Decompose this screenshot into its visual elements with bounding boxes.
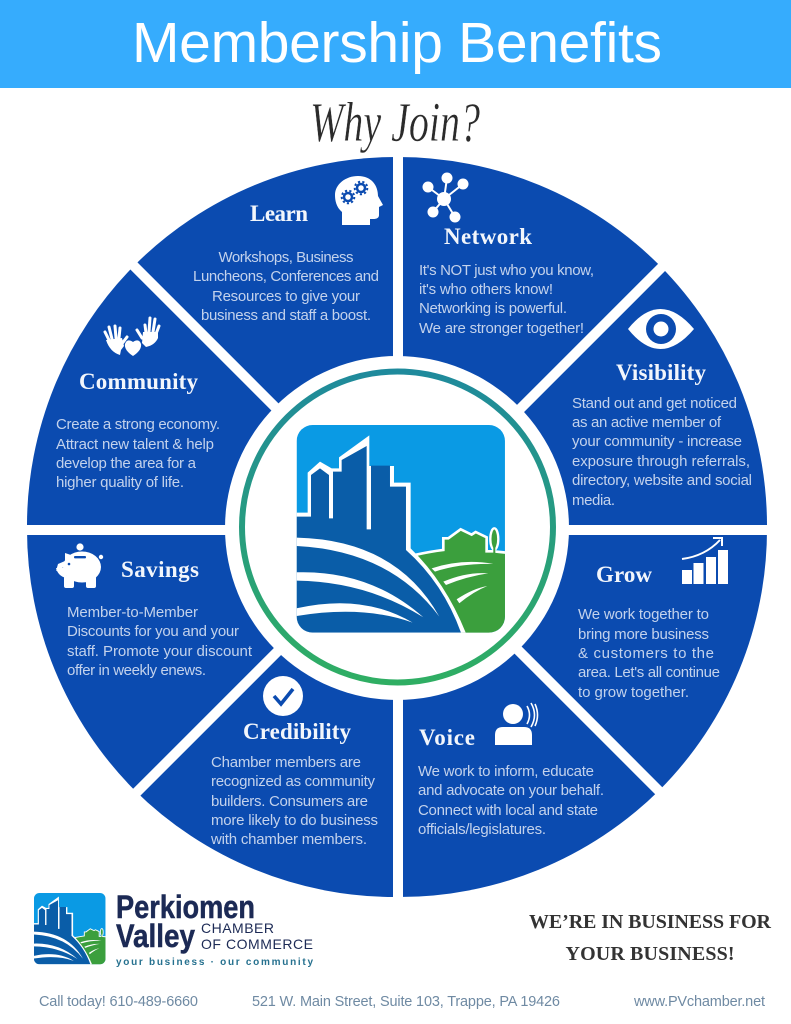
logo: center mark xyxy=(297,425,507,637)
text: Savings xyxy=(67,604,253,679)
heading: Community: Community xyxy=(79,369,198,394)
text: Credibility xyxy=(210,754,378,848)
text: Learn: Resources to give your xyxy=(212,288,360,305)
icon: eye xyxy=(628,309,694,349)
footer logo xyxy=(34,889,313,968)
icon: network nodes xyxy=(422,172,468,222)
panel: Learn xyxy=(134,157,397,529)
text: Network: Networking is powerful. xyxy=(419,300,567,317)
text: Voice: Connect with local and state xyxy=(418,802,598,819)
heading: Visibility: Visibility xyxy=(616,360,706,385)
text: Network: We are stronger together! xyxy=(419,320,584,337)
text: Visibility: your community - increase xyxy=(572,433,742,450)
text: Community xyxy=(56,416,220,491)
text: Learn xyxy=(193,249,379,324)
heading: Credibility: Credibility xyxy=(243,719,352,744)
heading: Savings: Savings xyxy=(121,557,199,582)
tagline: WE’RE IN BUSINESS FOR xyxy=(529,911,772,933)
text: Grow: area. Let's all continue xyxy=(578,664,720,681)
footer logo: OF COMMERCE xyxy=(201,936,313,952)
text: Network: It's NOT just who you know, xyxy=(419,262,594,279)
text: Savings: staff. Promote your discount xyxy=(67,643,253,660)
tagline xyxy=(529,911,772,965)
text: Credibility: Chamber members are xyxy=(211,754,361,771)
contact row: 521 W. Main Street, Suite 103, Trappe, PA 19426 xyxy=(252,994,560,1010)
panel: Visibility xyxy=(397,265,767,529)
text: Grow: We work together to xyxy=(578,606,709,623)
text: Grow: bring more business xyxy=(578,626,709,643)
footer logo: CHAMBER xyxy=(201,920,274,936)
text: Learn: Luncheons, Conferences and xyxy=(193,268,379,285)
text: Network: it's who others know! xyxy=(419,281,553,298)
text: Learn: Workshops, Business xyxy=(218,249,354,266)
text: Community: Attract new talent & help xyxy=(56,436,214,453)
text: Community: Create a strong economy. xyxy=(56,416,220,433)
contact row: www.PVchamber.net xyxy=(633,994,765,1010)
text: Visibility: media. xyxy=(572,492,615,509)
footer logo: your business · our community xyxy=(116,957,313,968)
text: Visibility: Stand out and get noticed xyxy=(572,395,737,412)
text: Savings: Member-to-Member xyxy=(67,604,198,621)
text: Community: develop the area for a xyxy=(56,455,197,472)
text: Visibility: as an active member of xyxy=(572,414,722,431)
icon: speaking person xyxy=(495,703,538,745)
panel: Network xyxy=(397,157,660,529)
text: Visibility xyxy=(572,395,752,509)
text: Grow xyxy=(578,606,720,701)
icon: bar chart growth xyxy=(682,538,728,584)
heading: Voice: Voice xyxy=(419,725,475,750)
footer logo: Valley xyxy=(116,918,195,954)
text: Credibility: recognized as community xyxy=(211,773,376,790)
tagline: YOUR BUSINESS! xyxy=(566,943,734,965)
text: Community: higher quality of life. xyxy=(56,474,184,491)
text: Grow: & customers to the xyxy=(578,645,714,662)
text: Voice: We work to inform, educate xyxy=(418,763,594,780)
subtitle: Why Join?: Why Join? xyxy=(310,92,480,154)
text: Savings: Discounts for you and your xyxy=(67,623,239,640)
panel: Credibility xyxy=(134,529,397,897)
text: Credibility: more likely to do business xyxy=(211,812,378,829)
text: Voice: and advocate on your behalf. xyxy=(418,782,604,799)
title: Membership Benefits xyxy=(132,11,662,75)
icon: piggy bank xyxy=(56,543,103,588)
text: Voice xyxy=(418,763,604,838)
icon: head with gears xyxy=(335,176,383,225)
contact row xyxy=(39,994,765,1010)
panel: Savings xyxy=(27,529,397,790)
center emblem xyxy=(225,356,569,700)
heading: Network: Network xyxy=(444,224,532,249)
title banner xyxy=(0,0,791,88)
footer logo: Perkiomen xyxy=(116,889,255,925)
heading: Grow: Grow xyxy=(596,562,652,587)
icon: check badge xyxy=(263,676,303,716)
text: Credibility: builders. Consumers are xyxy=(211,793,368,810)
text: Network xyxy=(419,262,594,337)
text: Credibility: with chamber members. xyxy=(210,831,367,848)
panel: Grow xyxy=(397,529,767,790)
text: Savings: offer in weekly enews. xyxy=(67,662,206,679)
text: Visibility: directory, website and social xyxy=(572,472,752,489)
icon: hands and heart xyxy=(105,318,159,356)
panel: Community xyxy=(27,265,397,529)
text: Visibility: exposure through referrals, xyxy=(572,453,750,470)
text: Learn: business and staff a boost. xyxy=(201,307,371,324)
heading: Learn: Learn xyxy=(250,201,308,226)
panel: Voice xyxy=(397,529,660,897)
text: Grow: to grow together. xyxy=(578,684,689,701)
text: Voice: officials/legislatures. xyxy=(418,821,546,838)
contact row: Call today! 610-489-6660 xyxy=(39,994,198,1010)
